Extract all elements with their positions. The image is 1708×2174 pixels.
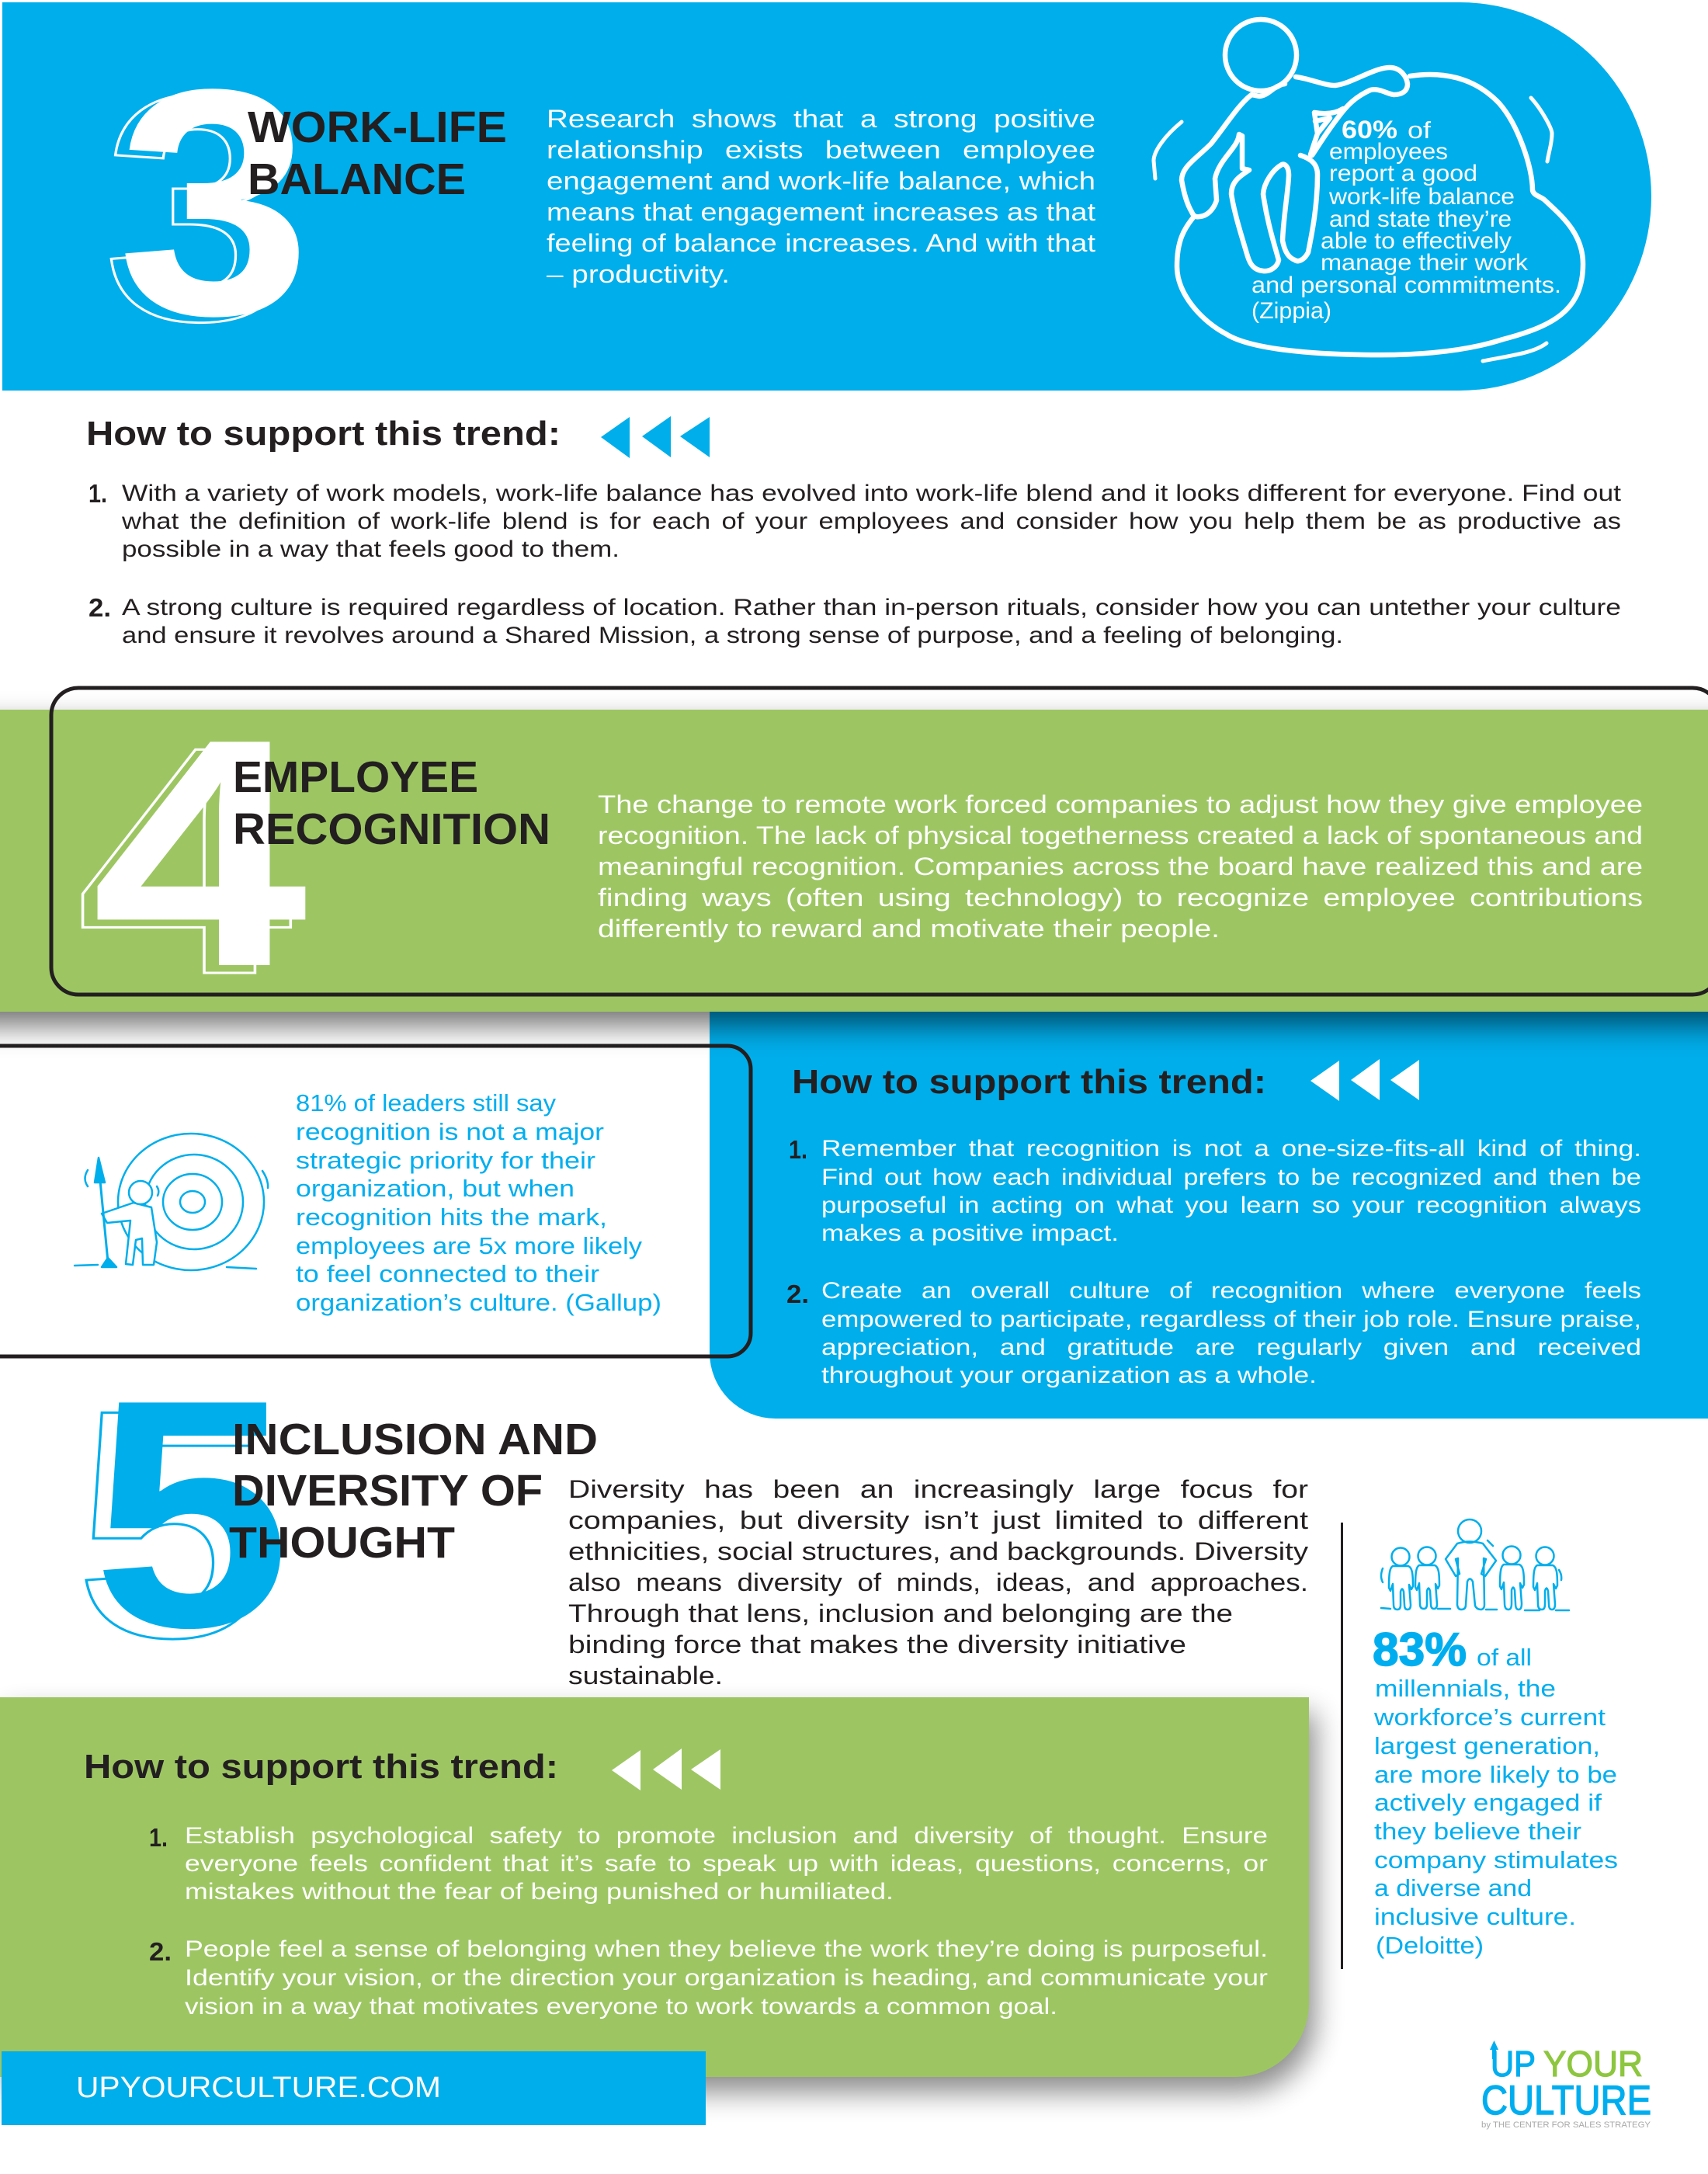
number 5: 5: [92, 1332, 290, 1695]
number 3: 3: [117, 22, 311, 382]
icon: person with arrow and target: [75, 1134, 268, 1270]
panel: blue recognition support background: [710, 1012, 1708, 1419]
list: item 1: [149, 1823, 1268, 1905]
heading: employee recognition: RECOGNITION: [233, 804, 550, 853]
list: item 2: [89, 593, 1621, 648]
list: item 1: [89, 479, 1621, 562]
list: item 1: Remember that recognition is not a one-size-fits-all kind of thing.: [821, 1136, 1641, 1162]
number 5: 5: [75, 1342, 273, 1705]
panel: how to support work-life balance: [86, 415, 1621, 648]
list: item 1: Establish psychological safety to promote inclusion and diversity of thought. Ensure: [185, 1823, 1268, 1849]
list: item 1: [789, 1135, 1641, 1246]
text block: work-life intro: – productivity.: [547, 260, 730, 288]
text block: 83% stat: company stimulates: [1374, 1846, 1618, 1874]
list: item 1: mistakes without the fear of being punished or humiliated.: [185, 1879, 894, 1905]
list: item 2: vision in a way that motivates everyone to work towards a common goal.: [185, 1994, 1057, 2019]
logo: up your culture: YOUR: [1543, 2044, 1643, 2084]
text block: 83% stat: of all: [1477, 1644, 1532, 1671]
list: item 2: People feel a sense of belonging when they believe the work they’re doing is purposeful.: [185, 1936, 1268, 1962]
callout: 60% of employees: employees: [1329, 139, 1448, 165]
text block: 83% stat: workforce’s current: [1373, 1703, 1606, 1731]
text block: 81% stat: recognition hits the mark,: [296, 1203, 607, 1231]
arrows: triple left: [1311, 1059, 1419, 1101]
icon: group of five people: [1381, 1519, 1569, 1610]
heading: how to support: How to support this trend:: [792, 1064, 1266, 1101]
heading: employee recognition: [233, 752, 550, 853]
list: item 1: 1.: [789, 1135, 807, 1164]
text block: 81% stat: organization’s culture. (Gallup): [296, 1289, 661, 1316]
icon: person leaning on balance ball: [1154, 19, 1583, 361]
text block: work-life intro: Research shows that a strong positive: [547, 105, 1095, 133]
list: item 2: [149, 1936, 1268, 2019]
text block: diversity intro: sustainable.: [568, 1662, 723, 1690]
text block: 83% stat: largest generation,: [1374, 1732, 1600, 1759]
panel: section 3 work-life balance: [2, 2, 1651, 391]
list: item 2: 2.: [149, 1937, 172, 1966]
callout: 60% of employees: report a good: [1329, 161, 1477, 186]
heading: inclusion and diversity of thought: [229, 1415, 598, 1567]
text block: diversity intro: Diversity has been an increasingly large focus for: [568, 1475, 1308, 1503]
panel: 83% millennials stat: [1341, 1519, 1618, 1969]
list: item 2: [786, 1278, 1641, 1388]
list: item 1: 1.: [149, 1823, 168, 1852]
text block: work-life intro: feeling of balance increases. And with that: [547, 229, 1095, 257]
panel: section 5 inclusion and diversity: [75, 1332, 1308, 1705]
text block: work-life intro: means that engagement increases as that: [547, 198, 1095, 226]
text block: work-life intro: [547, 105, 1095, 288]
text block: 83% stat: are more likely to be: [1374, 1761, 1617, 1788]
text block: recognition intro: finding ways (often using technology) to recognize employee contributions: [598, 884, 1643, 912]
callout: 60% of employees: work-life balance: [1328, 184, 1515, 210]
heading: inclusion and diversity of thought: INCLUSION AND: [232, 1415, 598, 1464]
list: item 2: and ensure it revolves around a Shared Mission, a strong sense of purpose, and a feeling of belonging.: [122, 623, 1343, 648]
text block: recognition intro: The change to remote work forced companies to adjust how they give employee: [598, 790, 1643, 818]
list: item 2: Create an overall culture of recognition where everyone feels: [821, 1278, 1641, 1304]
callout: 60% of employees: and state they’re: [1329, 207, 1512, 232]
frame: rounded black outline: [51, 688, 1708, 995]
callout: 60% of employees: able to effectively: [1321, 228, 1512, 254]
text block: recognition intro: recognition. The lack of physical togetherness created a lack of spontaneous and: [598, 821, 1643, 849]
list: item 2: 2.: [89, 593, 111, 622]
text block: 83% stat: inclusive culture.: [1374, 1903, 1576, 1930]
text block: 81% stat: 81% of leaders still say: [296, 1089, 557, 1117]
arrows: triple left: [601, 416, 710, 458]
text block: work-life intro: relationship exists between employee: [547, 136, 1095, 164]
logo: up your culture: CULTURE: [1481, 2078, 1651, 2124]
text block: 83% stat: millennials, the: [1375, 1675, 1556, 1702]
list: item 1: possible in a way that feels good to them.: [122, 537, 620, 562]
arrows: triple left: [612, 1749, 720, 1790]
heading: work-life balance: [248, 102, 507, 203]
list: item 2: appreciation, and gratitude are regularly given and received: [821, 1335, 1641, 1360]
list: item 2: 2.: [786, 1280, 809, 1308]
number 4: 4: [77, 679, 295, 1042]
heading: how to support: How to support this trend:: [86, 415, 561, 453]
callout: 60% of employees: and personal commitments.: [1251, 273, 1561, 298]
icon: up arrow on U: [1490, 2040, 1498, 2059]
panel: how to support inclusion: [0, 1697, 1315, 2092]
panel: section 4 employee recognition: [0, 672, 1708, 1042]
footer: website banner: [2, 2051, 706, 2125]
logo: up your culture: [1481, 2040, 1651, 2130]
list: item 2: A strong culture is required regardless of location. Rather than in-person rituals, consider how you can untether your culture: [122, 595, 1621, 620]
logo: up your culture: by THE CENTER FOR SALES STRATEGY: [1481, 2120, 1651, 2130]
callout: 60% of employees: (Zippia): [1251, 298, 1331, 324]
text block: diversity intro: ethnicities, social structures, and backgrounds. Diversity: [568, 1537, 1308, 1565]
heading: work-life balance: BALANCE: [248, 155, 466, 203]
text block: 81% stat: to feel connected to their: [296, 1260, 599, 1287]
list: item 1: what the definition of work-life blend is for each of your employees and consider how you help them be as productive as: [121, 509, 1621, 534]
list: item 1: With a variety of work models, work-life balance has evolved into work-life blend and it looks different for everyone. Find out: [122, 481, 1621, 506]
list: item 2: Identify your vision, or the direction your organization is heading, and communicate your: [185, 1965, 1268, 1991]
callout: 60% of employees: [1251, 116, 1561, 324]
panel: recognition stat box: [0, 1046, 751, 1356]
heading: how to support: How to support this trend:: [84, 1749, 558, 1786]
callout: 60% of employees: of: [1408, 116, 1431, 144]
text block: 83% stat: [1373, 1624, 1618, 1959]
logo: up your culture: UP: [1491, 2044, 1536, 2084]
text block: recognition intro: differently to reward and motivate their people.: [598, 915, 1220, 943]
heading: inclusion and diversity of thought: DIVERSITY OF: [232, 1466, 543, 1515]
text block: 83% stat: they believe their: [1374, 1818, 1581, 1845]
number 4: 4: [92, 672, 310, 1034]
callout: 60% of employees: 60%: [1342, 116, 1397, 144]
text block: work-life intro: engagement and work-life balance, which: [547, 167, 1095, 195]
text block: diversity intro: Through that lens, inclusion and belonging are the: [568, 1599, 1233, 1627]
list: item 1: Find out how each individual prefers to be recognized and then be: [821, 1165, 1641, 1190]
text block: 83% stat: a diverse and: [1374, 1874, 1532, 1901]
heading: work-life balance: WORK-LIFE: [248, 102, 507, 151]
text block: 81% stat: [296, 1089, 661, 1316]
list: item 2: throughout your organization as a whole.: [821, 1363, 1317, 1388]
list: item 1: everyone feels confident that it’s safe to speak up with ideas, questions, concerns, or: [185, 1851, 1268, 1877]
text block: recognition intro: meaningful recognition. Companies across the board have realized this and are: [598, 853, 1643, 880]
list: item 1: makes a positive impact.: [821, 1221, 1119, 1246]
heading: inclusion and diversity of thought: THOUGHT: [229, 1518, 455, 1567]
text block: 83% stat: actively engaged if: [1374, 1789, 1602, 1816]
text block: recognition intro: [598, 790, 1643, 943]
list: item 1: purposeful in acting on what you learn so your recognition always: [821, 1193, 1641, 1218]
heading: employee recognition: EMPLOYEE: [233, 752, 478, 801]
text block: 81% stat: recognition is not a major: [296, 1118, 604, 1145]
text block: diversity intro: [568, 1475, 1308, 1690]
footer: website banner: UPYOURCULTURE.COM: [76, 2072, 441, 2104]
text block: 83% stat: 83%: [1373, 1624, 1467, 1676]
text block: diversity intro: companies, but diversity isn’t just limited to different: [568, 1506, 1308, 1534]
list: item 2: empowered to participate, regardless of their job role. Ensure praise,: [821, 1307, 1641, 1332]
text block: diversity intro: also means diversity of minds, ideas, and approaches.: [568, 1568, 1308, 1596]
text block: 83% stat: (Deloitte): [1376, 1932, 1484, 1959]
text block: 81% stat: employees are 5x more likely: [296, 1232, 643, 1259]
list: item 1: 1.: [89, 479, 107, 508]
text block: 81% stat: strategic priority for their: [296, 1147, 595, 1174]
panel: how to support recognition: [786, 1059, 1641, 1388]
number 3: 3: [103, 27, 297, 387]
callout: 60% of employees: manage their work: [1321, 250, 1529, 276]
text block: diversity intro: binding force that makes the diversity initiative: [568, 1630, 1186, 1658]
text block: 81% stat: organization, but when: [296, 1175, 575, 1202]
